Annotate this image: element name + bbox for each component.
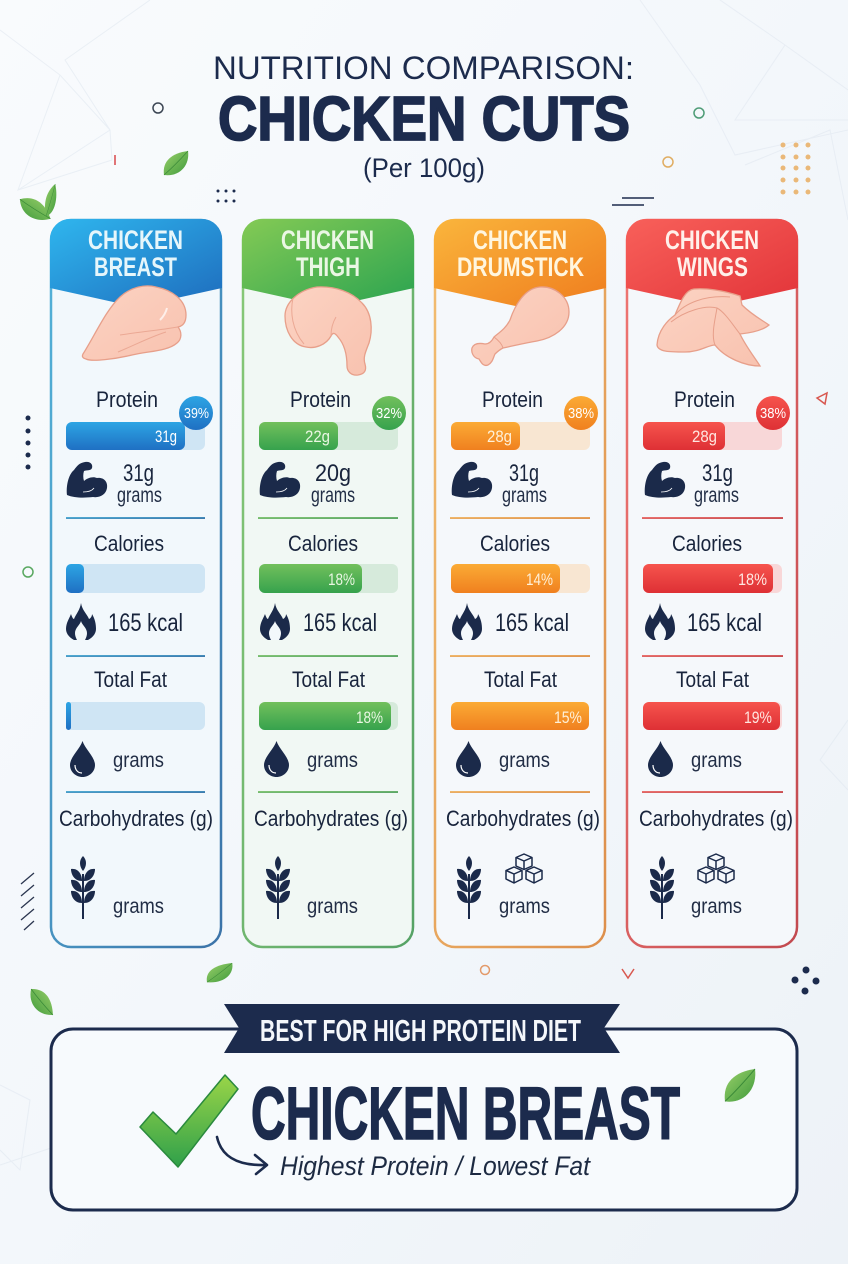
calories row [642,531,783,657]
protein row: grams [311,484,355,507]
callout: best for high protein diet [51,1004,797,1210]
panel: chicken drumstick [434,219,606,947]
title: line one: NUTRITION COMPARISON: [213,50,634,86]
protein row: 31g [702,460,733,487]
protein row: Protein [290,387,351,412]
total fat row [450,667,590,793]
banner text: BEST FOR HIGH PROTEIN DIET [260,1013,581,1048]
protein row [642,387,790,519]
heading: chicken drumstick: DRUMSTICK [457,252,584,282]
illustration: chicken breast [82,286,186,360]
protein row: 28g [487,427,512,446]
panel: chicken breast [50,219,222,947]
protein row: 31g [123,460,154,487]
total fat row: 18% [356,708,383,727]
protein row: 38% [568,405,594,422]
calories row: Calories [672,531,742,556]
calories row: 18% [738,570,767,589]
protein row [258,387,406,519]
carbohydrates row: grams [499,895,550,918]
protein row [450,387,598,519]
protein row: grams [502,484,547,507]
subtitle: (Per 100g) [363,153,485,183]
leaf: inside callout [725,1069,755,1102]
title: line two: CHICKEN CUTS [218,85,630,154]
calories row: 165 kcal [495,609,569,637]
header: chicken breast [50,219,222,307]
protein row: 22g [305,427,330,446]
calories row: 18% [328,570,355,589]
icon: curved arrow [217,1137,267,1174]
calories row: Calories [288,531,358,556]
heading: chicken thigh: CHICKEN [281,225,374,255]
heading: chicken drumstick [457,225,584,282]
heading: chicken thigh [281,225,374,282]
ribbon banner [224,1004,620,1053]
heading: chicken wings [665,225,759,282]
protein row: 31g [509,460,539,487]
total fat row: Total Fat [484,667,557,692]
protein row: Protein [96,387,158,412]
calories row: 165 kcal [687,609,762,637]
heading: chicken thigh: THIGH [296,252,360,282]
heading: chicken wings: WINGS [677,252,748,282]
protein row [66,387,213,519]
heading: chicken breast: CHICKEN [88,225,183,255]
carbohydrates row: Carbohydrates (g) [254,806,408,831]
calories row [66,531,205,657]
carbohydrates row: grams [691,895,742,918]
total fat row: grams [499,749,550,772]
leaves: top left [20,184,59,223]
carbohydrates row: grams [113,895,164,918]
leaf: lower centre [207,963,232,982]
total fat row [258,667,398,793]
calories row [258,531,398,657]
total fat row: 15% [554,708,582,727]
illustration: chicken wings [657,289,769,366]
total fat row: grams [307,749,358,772]
carbohydrates row: Carbohydrates (g) [446,806,600,831]
total fat row: Total Fat [94,667,167,692]
calories row: Calories [480,531,550,556]
total fat row: grams [691,749,742,772]
carbohydrates row [639,806,793,919]
calories row: 14% [526,570,553,589]
total fat row [642,667,783,793]
leaf: top centre [164,151,188,175]
calories row: 165 kcal [303,609,377,637]
decorative shapes: top [115,103,810,205]
total fat row: 19% [744,708,772,727]
calories row: Calories [94,531,164,556]
total fat row: Total Fat [676,667,749,692]
protein row: Protein [674,387,735,412]
carbohydrates row: Carbohydrates (g) [639,806,793,831]
carbohydrates row [254,806,408,919]
protein row: Protein [482,387,543,412]
winner reason: Highest Protein / Lowest Fat [280,1151,591,1181]
heading: chicken wings: CHICKEN [665,225,759,255]
protein row: 39% [184,405,209,422]
total fat row [66,667,205,793]
heading: chicken drumstick: CHICKEN [473,225,567,255]
total fat row: grams [113,749,164,772]
carbohydrates row: Carbohydrates (g) [59,806,213,831]
header: chicken drumstick [434,219,606,307]
protein row: 32% [376,405,402,422]
icon: check mark [140,1075,238,1167]
carbohydrates row [446,806,600,919]
calories row [450,531,590,657]
protein row: grams [117,484,162,507]
header: chicken wings [626,219,798,307]
carbohydrates row: grams [307,895,358,918]
panel: chicken wings [626,219,798,947]
illustration: chicken drumstick [472,287,569,365]
calories row: 165 kcal [108,609,183,637]
panel: chicken thigh [242,219,414,947]
protein row: 38% [760,405,786,422]
header: chicken thigh [242,219,414,307]
decorative shapes: lower [480,966,820,994]
decorative shapes: sides [21,393,827,930]
protein row: 31g [155,427,177,446]
heading: chicken breast: BREAST [94,252,177,282]
heading: chicken breast [88,225,183,282]
protein row: 20g [315,460,351,487]
total fat row: Total Fat [292,667,365,692]
protein row: grams [694,484,739,507]
carbohydrates row [59,806,213,919]
leaf: lower left [29,989,55,1015]
protein row: 28g [692,427,717,446]
illustration: chicken thigh [285,287,371,375]
